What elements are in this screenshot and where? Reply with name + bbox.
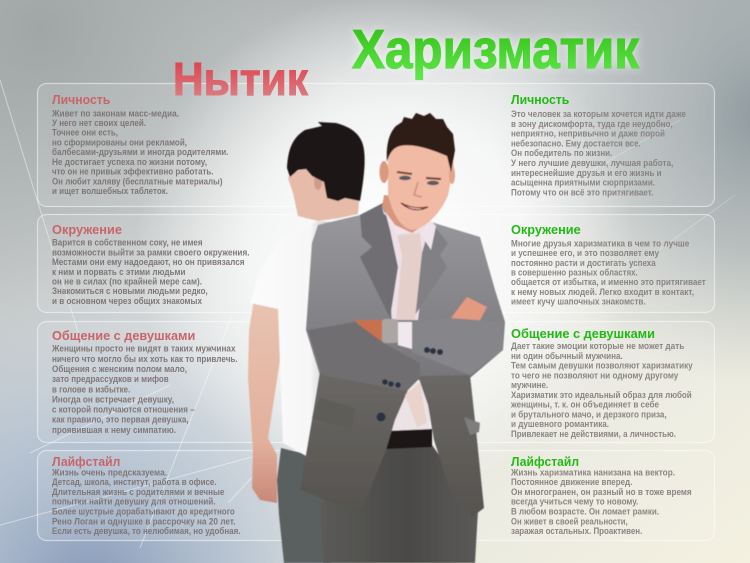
heading: Окружение xyxy=(52,222,122,237)
body text: в голове в избытке. xyxy=(52,384,130,394)
body text: в совершенно разных областях. xyxy=(511,268,638,278)
title: Нытик: Нытик xyxy=(173,53,309,105)
shirt front xyxy=(382,207,430,320)
body text: и душевного романтика. xyxy=(511,419,609,429)
body text: В любом возрасте. Он ломает рамки. xyxy=(511,506,659,516)
body text: постоянно расти и достигать успеха xyxy=(511,258,656,268)
body text: Он живет в своей реальности, xyxy=(511,516,628,526)
ears xyxy=(380,161,388,183)
body text: балбесами-друзьями и иногда родителями. xyxy=(52,147,228,157)
right column: Общение с девушками xyxy=(510,326,693,439)
body text: Привлекает не действиями, а личностью. xyxy=(511,429,676,439)
right column: Лайфстайл xyxy=(510,454,692,536)
heading: Общение с девушками xyxy=(52,328,195,343)
title: Харизматик: Харизматик xyxy=(352,18,639,80)
body text: проявившая к нему симпатию. xyxy=(52,425,176,435)
body text: Если есть девушка, то нелюбимая, но удобная. xyxy=(52,526,240,536)
body text: Жизнь очень предсказуема. xyxy=(51,467,167,477)
body text: он не в силах (по крайней мере сам). xyxy=(52,276,202,286)
body text xyxy=(51,108,228,196)
body text: Знакомиться с новыми людьми редко, xyxy=(52,286,208,296)
watch xyxy=(382,319,398,343)
body text: мужчине. xyxy=(511,380,548,390)
left column: Лайфстайл xyxy=(51,454,241,536)
body text: общается от избытка, и именно это притягивает xyxy=(511,277,706,287)
arm xyxy=(248,300,282,503)
body text: Многие друзья харизматика в чем то лучше xyxy=(511,238,689,248)
hair xyxy=(287,122,365,201)
neck and face xyxy=(288,165,360,221)
panel row: Личность xyxy=(38,84,714,206)
body text: небезопасно. Ему достается все. xyxy=(511,138,641,148)
body text: ни один обычный мужчина. xyxy=(511,351,623,361)
brows xyxy=(397,172,441,179)
body text: и в основном через общих знакомых xyxy=(52,296,202,306)
body text xyxy=(510,467,692,536)
body text: Постоянное движение вперед. xyxy=(511,477,632,487)
upper sleeve xyxy=(410,318,503,375)
body text: интереснейшие друзья и его жизнь и xyxy=(511,168,662,178)
body text: попытки найти девушку для отношений. xyxy=(52,497,216,507)
heading: Лайфстайл xyxy=(511,454,579,469)
t-shirt xyxy=(250,221,330,458)
body text: Это человек за которым хочется идти даже xyxy=(511,109,686,119)
tie xyxy=(396,233,422,320)
illustration: whiner seen from behind xyxy=(248,122,365,563)
ear xyxy=(314,174,322,190)
body text: зато предрассудков и мифов xyxy=(52,374,169,384)
body text: заражая остальных. Проактивен. xyxy=(511,526,642,536)
body text: Длительная жизнь с родителями и вечные xyxy=(52,487,224,497)
body text xyxy=(51,344,238,435)
body text: Живет по законам масс-медиа. xyxy=(51,108,179,118)
body text xyxy=(52,238,250,306)
body text: имеет кучу шапочных знакомств. xyxy=(511,297,646,307)
neck xyxy=(382,195,435,233)
body text: Жизнь харизматика нанизана на вектор. xyxy=(510,467,675,477)
body text: Иногда он встречает девушку, xyxy=(52,394,174,404)
trousers xyxy=(320,445,478,563)
lower sleeve xyxy=(308,322,420,391)
body text: но сформированы они рекламой, xyxy=(52,137,187,147)
body text xyxy=(511,109,686,197)
left lapel xyxy=(360,203,398,318)
body text: Рено Логан и однушке в рассрочку на 20 лет. xyxy=(52,516,236,526)
body text: Женщины просто не видят в таких мужчинах xyxy=(51,344,236,354)
body text: женщины, т. к. он объединяет в себе xyxy=(510,400,659,410)
shirt lower xyxy=(388,380,430,432)
body text: Дает такие эмоции которые не может дать xyxy=(511,341,685,351)
belt xyxy=(386,429,432,449)
hand xyxy=(448,297,487,330)
body text: У него нет своих целей. xyxy=(52,118,146,128)
right column: Личность xyxy=(511,92,686,197)
jeans xyxy=(277,448,330,563)
body text: и успешнее его, и это позволяет ему xyxy=(511,248,659,258)
heading: Общение с девушками xyxy=(511,326,655,341)
body text: ничего что могло бы их хоть как то привлечь. xyxy=(52,354,238,364)
body text: с которой получаются отношения – xyxy=(52,405,195,415)
shirt cuff xyxy=(398,322,412,349)
body text: Он многогранен, он разный но в тоже время xyxy=(511,487,692,497)
right column: Окружение xyxy=(511,222,706,307)
body text: то чего не позволяют ни одному другому xyxy=(511,370,678,380)
body text: Он любит халяву (бесплатные материалы) xyxy=(52,176,223,186)
illustration: charismatic man in suit xyxy=(300,113,505,563)
body text: к нему новых людей. Легко входит в контакт, xyxy=(511,287,694,297)
body text: и ищет волшебных таблеток. xyxy=(52,186,168,196)
heading: Окружение xyxy=(511,222,581,237)
body text: Харизматик это идеальный образ для любой xyxy=(511,390,692,400)
body text xyxy=(51,467,241,536)
left column: Окружение xyxy=(52,222,250,306)
body text: У него лучшие девушки, лучшая работа, xyxy=(511,158,673,168)
body text xyxy=(510,341,693,439)
mouth xyxy=(401,203,428,210)
face xyxy=(388,135,454,230)
body text: Не достигает успеха по жизни потому, xyxy=(52,157,207,167)
body text: к ним и порвать с этими людьми xyxy=(52,267,186,277)
body text: Детсад, школа, институт, работа в офисе. xyxy=(52,477,216,487)
body text: Более шустрые дорабатывают до кредитного xyxy=(52,506,235,516)
body text: как правило, это первая девушка, xyxy=(52,415,189,425)
heading: Личность xyxy=(52,92,110,107)
jacket lower left xyxy=(300,372,408,514)
body text: Тем самым девушки позволяют харизматику xyxy=(511,361,693,371)
collar xyxy=(382,207,436,250)
jacket upper xyxy=(306,203,505,380)
panel row: Лайфстайл xyxy=(38,450,714,540)
body text: Местами они ему надоедают, но он привязался xyxy=(52,257,244,267)
panel row: Окружение xyxy=(38,214,714,312)
body text: возможности выйти за рамки своего окружения. xyxy=(52,247,250,257)
body text: и брутального мачо, и дерзкого приза, xyxy=(511,410,667,420)
body text: Потому что он всё это притягивает. xyxy=(511,187,653,197)
body text: Общения с женским полом мало, xyxy=(52,364,187,374)
lower tie xyxy=(405,383,427,427)
jacket buttons xyxy=(376,347,443,422)
eyes xyxy=(399,176,411,180)
body text: что он не привык эффективно работать. xyxy=(52,167,214,177)
body text xyxy=(511,238,706,307)
left column: Общение с девушками xyxy=(51,328,238,435)
body text: всегда учиться чему то новому. xyxy=(511,497,638,507)
body text: Точнее они есть, xyxy=(52,128,118,138)
body text: асыщенна приятными сюрпризами. xyxy=(511,178,655,188)
panel row: Общение с девушками xyxy=(38,322,714,442)
body text: неприятно, непривычно и даже порой xyxy=(511,129,665,139)
heading: Личность xyxy=(511,92,569,107)
body text: Варится в собственном соку, не имея xyxy=(52,238,203,248)
body text: в зону дискомфорта, туда где неудобно, xyxy=(511,119,673,129)
nose shadow xyxy=(414,182,422,197)
hair xyxy=(387,113,455,172)
pocket flaps xyxy=(312,398,355,430)
title: Харизматик: Харизматик xyxy=(352,18,639,80)
wrist xyxy=(355,320,385,342)
right lapel xyxy=(413,222,448,318)
body text: Он победитель по жизни. xyxy=(511,148,612,158)
left column: Личность xyxy=(51,92,228,196)
jacket lower right xyxy=(418,375,484,517)
heading: Лайфстайл xyxy=(52,454,120,469)
